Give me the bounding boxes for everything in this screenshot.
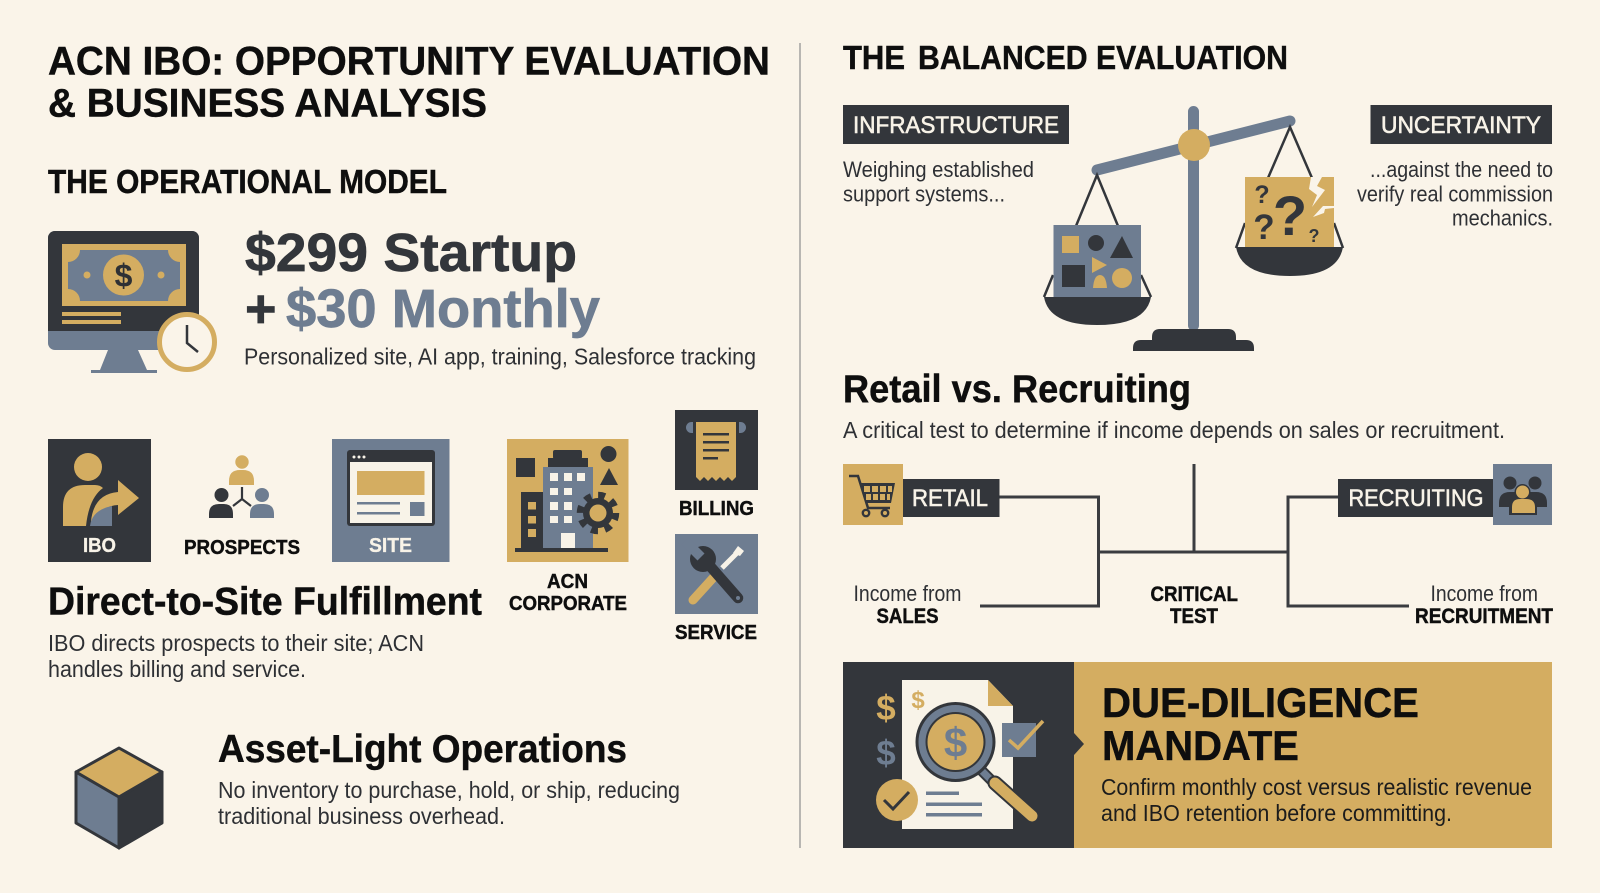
text: direct-to-site description: IBO directs prospects to their site; ACN: [48, 630, 424, 656]
icon: prospects: PROSPECTS: [184, 536, 300, 559]
text: asset-light description: No inventory to purchase, hold, or ship, reducing: [218, 777, 680, 803]
text: income from recruitment: RECRUITMENT: [1415, 605, 1553, 628]
icon: cube: [76, 748, 162, 848]
startup price: [245, 223, 600, 339]
icon: monitor with cash and clock: [48, 231, 214, 373]
title: & BUSINESS ANALYSIS: [48, 82, 487, 126]
text: critical test description: A critical test to determine if income depends on sales or recruitment.: [843, 417, 1505, 443]
startup price: $299 Startup: [245, 223, 577, 283]
heading: due-diligence mandate: MANDATE: [1102, 722, 1299, 769]
text: due-diligence description: Confirm monthly cost versus realistic revenue: [1101, 774, 1532, 800]
text: income from recruitment: [1415, 581, 1553, 628]
label: uncertainty: [1370, 105, 1552, 144]
startup includes text: Personalized site, AI app, training, Salesforce tracking: [244, 344, 756, 370]
text: weighing support systems: Weighing established: [843, 157, 1034, 182]
icon: balance scale: ?: [1273, 184, 1307, 247]
heading: the operational model: THE OPERATIONAL MODEL: [48, 163, 447, 200]
text: critical test: [1150, 583, 1238, 628]
startup price: $30 Monthly: [286, 279, 600, 339]
icon: retail cart: [843, 464, 903, 525]
text: due-diligence description: [1101, 774, 1532, 826]
label: infrastructure: [843, 105, 1069, 144]
icon: balance scale: ?: [1308, 226, 1320, 246]
label: uncertainty: UNCERTAINTY: [1381, 112, 1541, 139]
text: weighing support systems: support systems...: [843, 182, 1005, 206]
heading: due-diligence mandate: DUE-DILIGENCE: [1102, 679, 1419, 726]
title: [48, 40, 770, 126]
icon: document with magnifier: [876, 680, 1043, 829]
panel: due-diligence mandate: [843, 662, 1552, 848]
icon: ACN corporate: CORPORATE: [509, 592, 627, 615]
text: asset-light description: traditional business overhead.: [218, 803, 505, 829]
heading: due-diligence mandate: [1102, 679, 1419, 769]
icon: service: [675, 534, 758, 644]
text: direct-to-site description: handles billing and service.: [48, 656, 306, 682]
text: income from sales: [854, 581, 962, 628]
heading: retail vs recruiting: Retail vs. Recruiting: [843, 368, 1191, 411]
icon: IBO: IBO: [83, 535, 116, 557]
label: infrastructure: INFRASTRUCTURE: [853, 112, 1059, 139]
icon: site: SITE: [369, 535, 412, 557]
startup price: +: [245, 279, 277, 339]
icon: document with magnifier: $: [876, 734, 896, 773]
icon: balance scale: ?: [1253, 208, 1275, 247]
text: critical test: TEST: [1170, 605, 1218, 628]
text: income from sales: SALES: [876, 605, 938, 628]
icon: ACN corporate: [507, 439, 628, 615]
label: recruiting: [1338, 479, 1493, 517]
heading: asset-light operations: Asset-Light Operations: [218, 728, 627, 771]
text: against commission mechanics: ...against the need to: [1370, 157, 1553, 182]
heading: the balanced evaluation: BALANCED EVALUATION: [918, 39, 1288, 76]
text: direct-to-site description: [48, 630, 424, 682]
text: against commission mechanics: [1357, 157, 1553, 230]
label: retail: RETAIL: [912, 485, 988, 512]
icon: document with magnifier: $: [911, 687, 925, 714]
heading: the balanced evaluation: THE: [843, 39, 905, 76]
icon: service: SERVICE: [675, 621, 757, 644]
icon: billing: [675, 410, 758, 520]
text: against commission mechanics: mechanics.: [1452, 206, 1553, 230]
text: asset-light description: [218, 777, 680, 829]
text: against commission mechanics: verify real commission: [1357, 182, 1553, 206]
text: critical test: CRITICAL: [1150, 583, 1238, 606]
icon: IBO: [48, 439, 151, 562]
text: due-diligence description: and IBO retention before committing.: [1101, 800, 1452, 826]
icon: balance scale: ?: [1254, 181, 1270, 209]
label: recruiting: RECRUITING: [1348, 485, 1484, 512]
icon: prospects: [184, 455, 300, 559]
heading: direct-to-site fulfillment: Direct-to-Site Fulfillment: [48, 580, 482, 624]
icon: document with magnifier: $: [944, 719, 967, 766]
icon: document with magnifier: $: [876, 689, 896, 728]
icon: billing: BILLING: [679, 497, 754, 520]
diagram: connector lines: [980, 464, 1409, 606]
icon: ACN corporate: ACN: [547, 570, 588, 593]
text: income from recruitment: Income from: [1430, 581, 1538, 606]
text: weighing support systems: [843, 157, 1034, 206]
title: ACN IBO: OPPORTUNITY EVALUATION: [48, 40, 770, 84]
icon: recruiting people: [1493, 464, 1552, 525]
icon: site: [332, 439, 450, 562]
text: income from sales: Income from: [854, 581, 962, 606]
icon: monitor with cash and clock: $: [115, 258, 133, 294]
label: retail: [903, 479, 1000, 517]
icon: balance scale: [1044, 106, 1343, 351]
